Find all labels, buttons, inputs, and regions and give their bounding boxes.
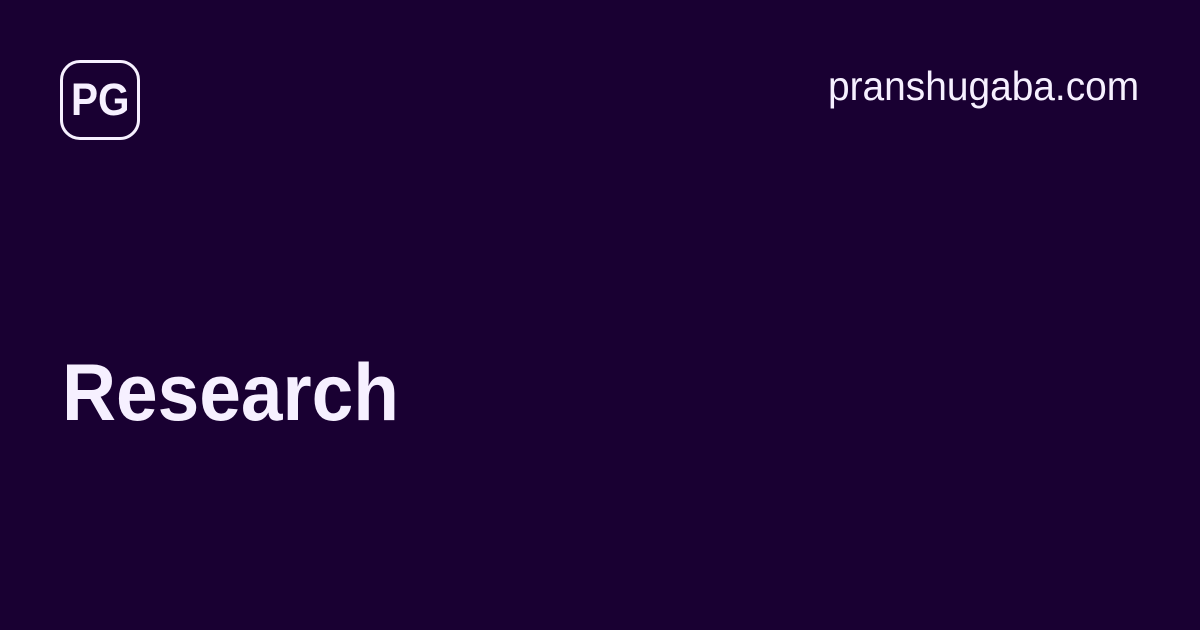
website address: pranshugaba.com bbox=[828, 63, 1139, 109]
logo initials: PG bbox=[71, 74, 130, 125]
logo: PG rounded badge bbox=[60, 60, 140, 140]
title: Research bbox=[62, 348, 399, 438]
